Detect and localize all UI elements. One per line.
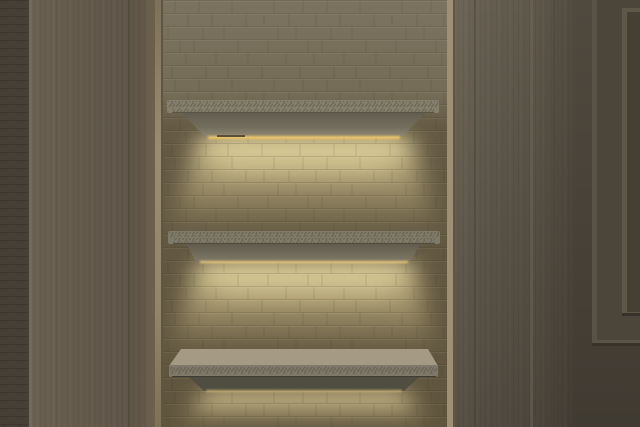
middle shelf — [168, 231, 440, 263]
panel inner moulding — [622, 8, 640, 316]
middle shelf soffit — [186, 243, 421, 262]
niche back wall — [155, 0, 447, 427]
middle shelf light strip — [200, 261, 408, 263]
glow lighting beneath shelves — [163, 0, 447, 427]
bottom shelf — [169, 349, 438, 392]
left pilaster — [29, 0, 155, 427]
bottom shelf top surface — [169, 349, 438, 366]
top shelf soffit — [180, 112, 426, 137]
glow under top shelf — [168, 136, 438, 234]
bottom shelf rope moulding — [169, 365, 438, 377]
embossed brick texture — [163, 0, 447, 427]
glow under middle shelf — [168, 262, 438, 354]
top shelf rope moulding — [167, 100, 439, 113]
top shelf light strip — [208, 136, 400, 139]
middle shelf rope moulding — [168, 231, 440, 244]
glow under bottom shelf — [178, 391, 428, 427]
right framed wall panel — [575, 0, 640, 427]
bottom shelf soffit — [188, 376, 420, 391]
left dark wall — [0, 0, 29, 427]
bottom shelf light strip — [206, 390, 402, 392]
panel outer moulding — [592, 0, 640, 346]
top shelf — [167, 100, 439, 139]
top shelf fixture — [217, 135, 245, 137]
right pilaster — [447, 0, 575, 427]
